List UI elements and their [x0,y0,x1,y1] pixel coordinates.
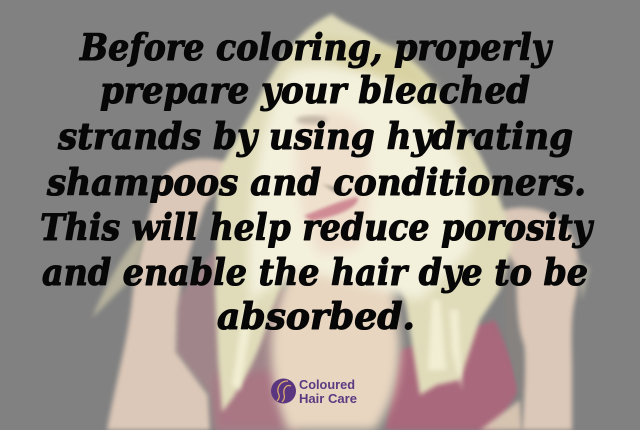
main tip text: strands by using hydrating [57,116,573,158]
logo icon [271,378,296,404]
main tip text: prepare your bleached [100,70,530,112]
left stray strand [92,225,148,318]
hair mass [215,14,512,412]
pale strands [232,300,462,390]
red top right [385,320,522,430]
logo text: Hair Care [299,392,357,406]
right arm and hand [497,208,579,430]
logo text [299,378,357,406]
face skin [297,111,369,255]
main tip text [40,27,594,338]
eye shadow [296,116,328,124]
right stray strand [575,260,590,300]
red top left [176,250,300,430]
main tip text: and enable the hair dye to be [42,252,588,294]
logo: Coloured Hair Care [271,378,357,406]
logo text: Coloured [299,378,355,392]
lips [304,197,358,221]
chest and neck [271,225,400,430]
bright hair and face area [249,67,474,300]
main tip text: Before coloring, properly [79,27,553,69]
left arm and hand [107,159,232,430]
grey gap by right arm [505,250,524,405]
main tip text: This will help reduce porosity [40,207,594,249]
photo: blonde woman behind a translucent overlay [92,14,590,430]
upper hair tone [310,35,440,90]
mouth line [322,184,345,192]
main tip text: shampoos and conditioners. [46,162,586,204]
right lower shoulder [480,400,522,430]
main tip text: absorbed. [217,296,415,338]
